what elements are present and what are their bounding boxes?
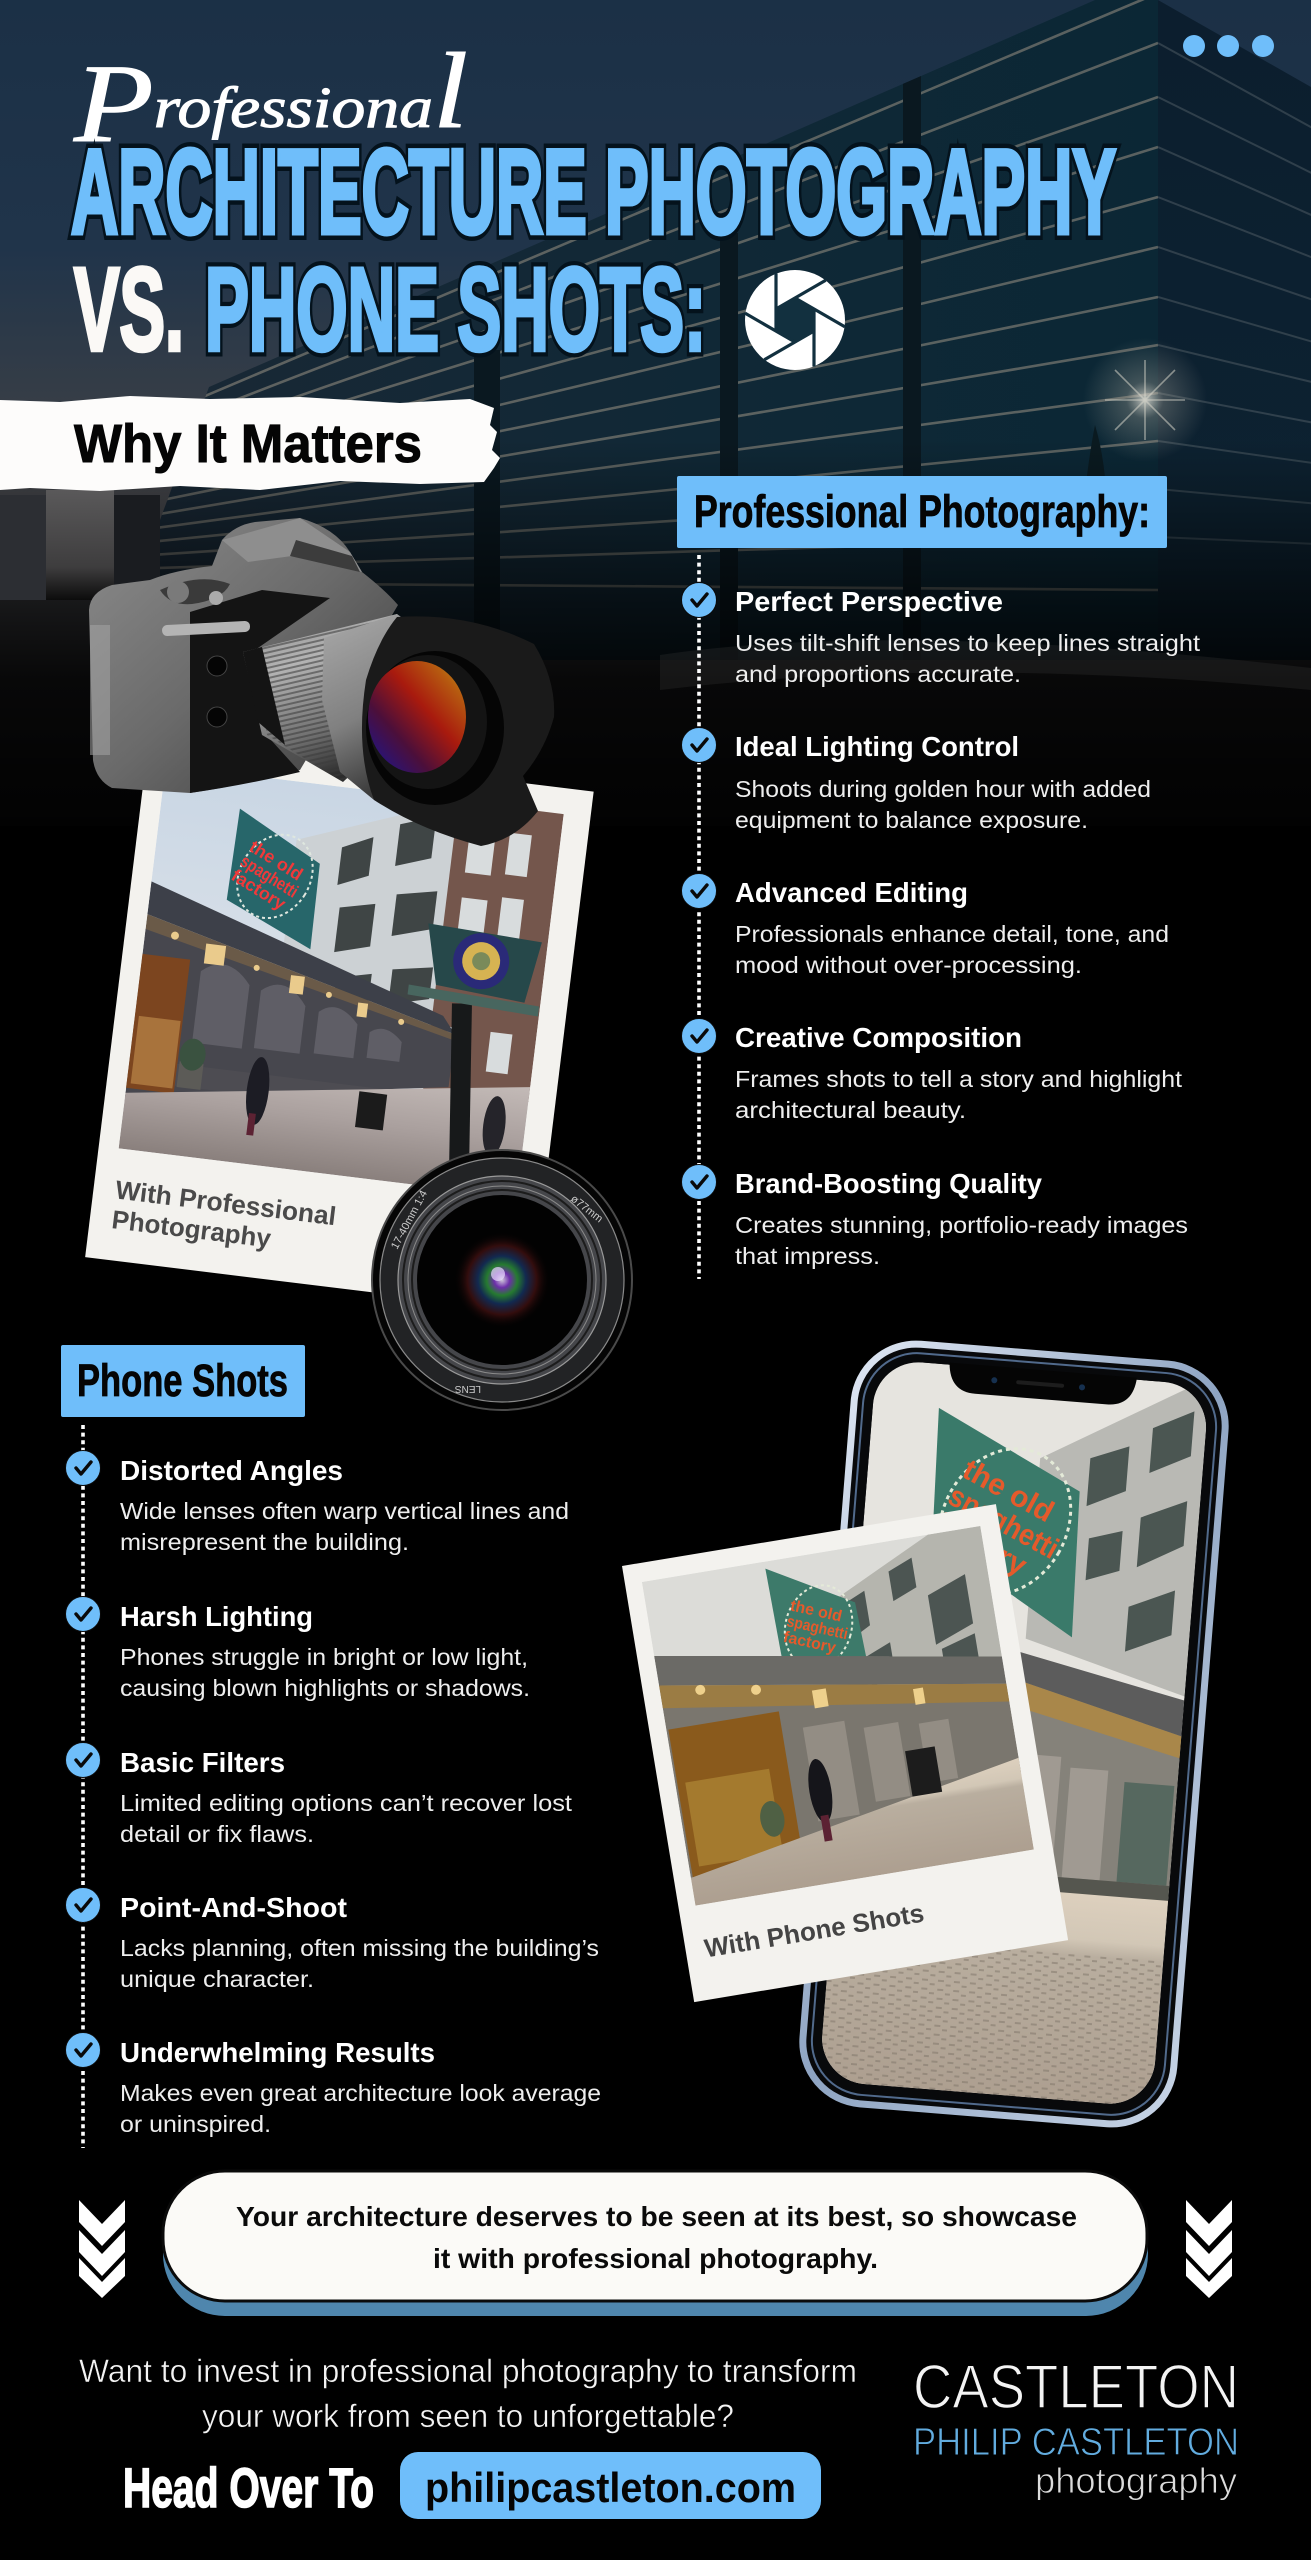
callout: closing statement xyxy=(163,2171,1148,2316)
heading: Phone Shots xyxy=(61,1345,305,1417)
panel: phone shots list xyxy=(61,1345,601,2148)
lens barrel xyxy=(243,614,430,782)
item: Distorted Angles: misrepresent the building. xyxy=(120,1529,409,1555)
logo: Castleton: PHILIP CASTLETON xyxy=(913,2421,1239,2464)
clock post xyxy=(408,924,542,1160)
smartphone xyxy=(795,1339,1233,2129)
item: Point-And-Shoot xyxy=(66,1888,599,1992)
icon: left chevrons xyxy=(79,2200,125,2298)
left building in the background xyxy=(0,490,160,600)
sign: the old spaghetti factory: the old xyxy=(246,836,306,885)
item: Advanced Editing xyxy=(682,874,1169,978)
icon: right chevrons xyxy=(1186,2200,1232,2298)
caption xyxy=(110,1174,338,1261)
lens hood xyxy=(362,616,554,846)
item: Creative Composition xyxy=(682,1018,1183,1123)
brush banner: why it matters: Why It Matters xyxy=(74,414,422,474)
item: Point-And-Shoot: Lacks planning, often missing the building’s xyxy=(120,1935,599,1961)
item: Basic Filters: Limited editing options can’t recover lost xyxy=(120,1790,573,1816)
logo: Castleton: CASTLETON xyxy=(913,2353,1239,2422)
camera body xyxy=(89,518,398,793)
heading line 2 xyxy=(74,244,706,376)
heading: Phone Shots: Phone Shots xyxy=(77,1355,288,1406)
item: Distorted Angles: Distorted Angles xyxy=(120,1455,343,1486)
lens glass xyxy=(368,661,466,773)
photo: restaurant, phone: spaghetti xyxy=(785,1613,849,1643)
call to action text: your work from seen to unforgettable? xyxy=(202,2398,734,2434)
item: Perfect Perspective: Perfect Perspective xyxy=(735,586,1003,617)
item: Underwhelming Results: Makes even great architecture look average xyxy=(120,2080,601,2106)
item: Underwhelming Results: or uninspired. xyxy=(120,2111,271,2137)
item: Basic Filters: detail or fix flaws. xyxy=(120,1821,314,1847)
item: Harsh Lighting xyxy=(66,1596,530,1701)
photo: restaurant, phone xyxy=(642,1526,1034,1906)
item: Harsh Lighting: Phones struggle in bright or low light, xyxy=(120,1644,528,1670)
item: Brand-Boosting Quality: that impress. xyxy=(735,1243,880,1269)
script word: Professional: P xyxy=(73,42,154,166)
notch xyxy=(947,1363,1137,1407)
item: Advanced Editing: mood without over-processing. xyxy=(735,952,1082,978)
item: Harsh Lighting: Harsh Lighting xyxy=(120,1601,313,1632)
script word: Professional: rofessiona xyxy=(154,75,433,140)
header dots xyxy=(1183,35,1274,57)
phone screen photo xyxy=(819,1351,1210,2107)
logo: Castleton: photography xyxy=(1035,2460,1237,2501)
call to action text: Want to invest in professional photography to transform xyxy=(79,2353,857,2389)
item: Underwhelming Results xyxy=(66,2032,601,2137)
photo: restaurant, phone: factory xyxy=(782,1629,837,1657)
item: Point-And-Shoot: unique character. xyxy=(120,1966,314,1992)
photo: restaurant, professional xyxy=(118,778,564,1184)
callout: closing statement: Your architecture deserves to be seen at its best, so showcase xyxy=(236,2201,1077,2232)
item: Brand-Boosting Quality xyxy=(682,1164,1188,1269)
title xyxy=(71,32,1116,376)
lens: 17-40mm 1:4 xyxy=(389,1189,430,1251)
icon: camera aperture xyxy=(745,270,845,370)
item: Brand-Boosting Quality: Brand-Boosting Quality xyxy=(735,1168,1042,1199)
item: Perfect Perspective: and proportions accurate. xyxy=(735,661,1021,687)
item: Creative Composition: architectural beauty. xyxy=(735,1097,966,1123)
caption: With Professional xyxy=(114,1174,338,1231)
logo: Castleton xyxy=(913,2353,1239,2501)
panel: professional photography list xyxy=(677,476,1201,1279)
item: Creative Composition: Creative Composition xyxy=(735,1022,1022,1053)
polaroid: with phone shots xyxy=(622,1504,1068,2002)
item: Distorted Angles xyxy=(66,1450,569,1555)
item: Creative Composition: Frames shots to tell a story and highlight xyxy=(735,1066,1183,1092)
item: Perfect Perspective: Uses tilt-shift lenses to keep lines straight xyxy=(735,630,1201,656)
item: Ideal Lighting Control: equipment to balance exposure. xyxy=(735,807,1088,833)
caption: With Phone Shots xyxy=(702,1898,926,1963)
sign: the old spaghetti factory xyxy=(226,808,320,950)
heading line 2: VS. xyxy=(74,244,184,376)
item: Advanced Editing: Advanced Editing xyxy=(735,877,968,908)
heading line 2: PHONE SHOTS: xyxy=(205,244,706,376)
item: Perfect Perspective xyxy=(682,582,1201,687)
item: Distorted Angles: Wide lenses often warp vertical lines and xyxy=(120,1498,569,1524)
caption: Photography xyxy=(110,1204,273,1254)
sign: the old spaghetti factory: spaghetti xyxy=(237,851,302,902)
callout: closing statement: it with professional photography. xyxy=(433,2243,878,2274)
sign: the old spaghetti factory: factory xyxy=(228,865,289,914)
head over to: Head Over To xyxy=(123,2456,374,2519)
photo: restaurant, phone: the old xyxy=(789,1598,843,1626)
url button xyxy=(400,2452,821,2519)
call to action text xyxy=(79,2353,857,2434)
brush banner: why it matters xyxy=(0,396,500,491)
item: Basic Filters: Basic Filters xyxy=(120,1747,285,1778)
heading: Professional Photography: Professional Photography: xyxy=(694,486,1150,537)
script word: Professional: l xyxy=(433,32,468,151)
phone screen photo: spaghetti xyxy=(943,1479,1064,1566)
heading: Professional Photography xyxy=(677,476,1167,548)
item: Point-And-Shoot: Point-And-Shoot xyxy=(120,1892,347,1923)
item: Advanced Editing: Professionals enhance detail, tone, and xyxy=(735,921,1169,947)
url button: philipcastleton.com xyxy=(425,2464,796,2511)
phone screen photo: the old xyxy=(957,1453,1059,1529)
item: Harsh Lighting: causing blown highlights or shadows. xyxy=(120,1675,530,1701)
phone screen photo: factory xyxy=(928,1506,1032,1583)
item: Ideal Lighting Control: Ideal Lighting Control xyxy=(735,731,1019,762)
polaroid: with professional photography xyxy=(85,737,594,1312)
item: Ideal Lighting Control xyxy=(682,728,1151,833)
item: Underwhelming Results: Underwhelming Results xyxy=(120,2037,435,2068)
item: Brand-Boosting Quality: Creates stunning, portfolio-ready images xyxy=(735,1212,1188,1238)
item: Basic Filters xyxy=(66,1742,573,1847)
hero background: building photo xyxy=(0,0,1311,690)
heading line 2: PHONE SHOTS: xyxy=(205,244,706,376)
DSLR camera xyxy=(89,518,554,846)
lens: LENS xyxy=(455,1383,481,1394)
item: Ideal Lighting Control: Shoots during golden hour with added xyxy=(735,776,1151,802)
lens: ø77mm xyxy=(568,1193,605,1225)
lens xyxy=(372,1150,632,1410)
